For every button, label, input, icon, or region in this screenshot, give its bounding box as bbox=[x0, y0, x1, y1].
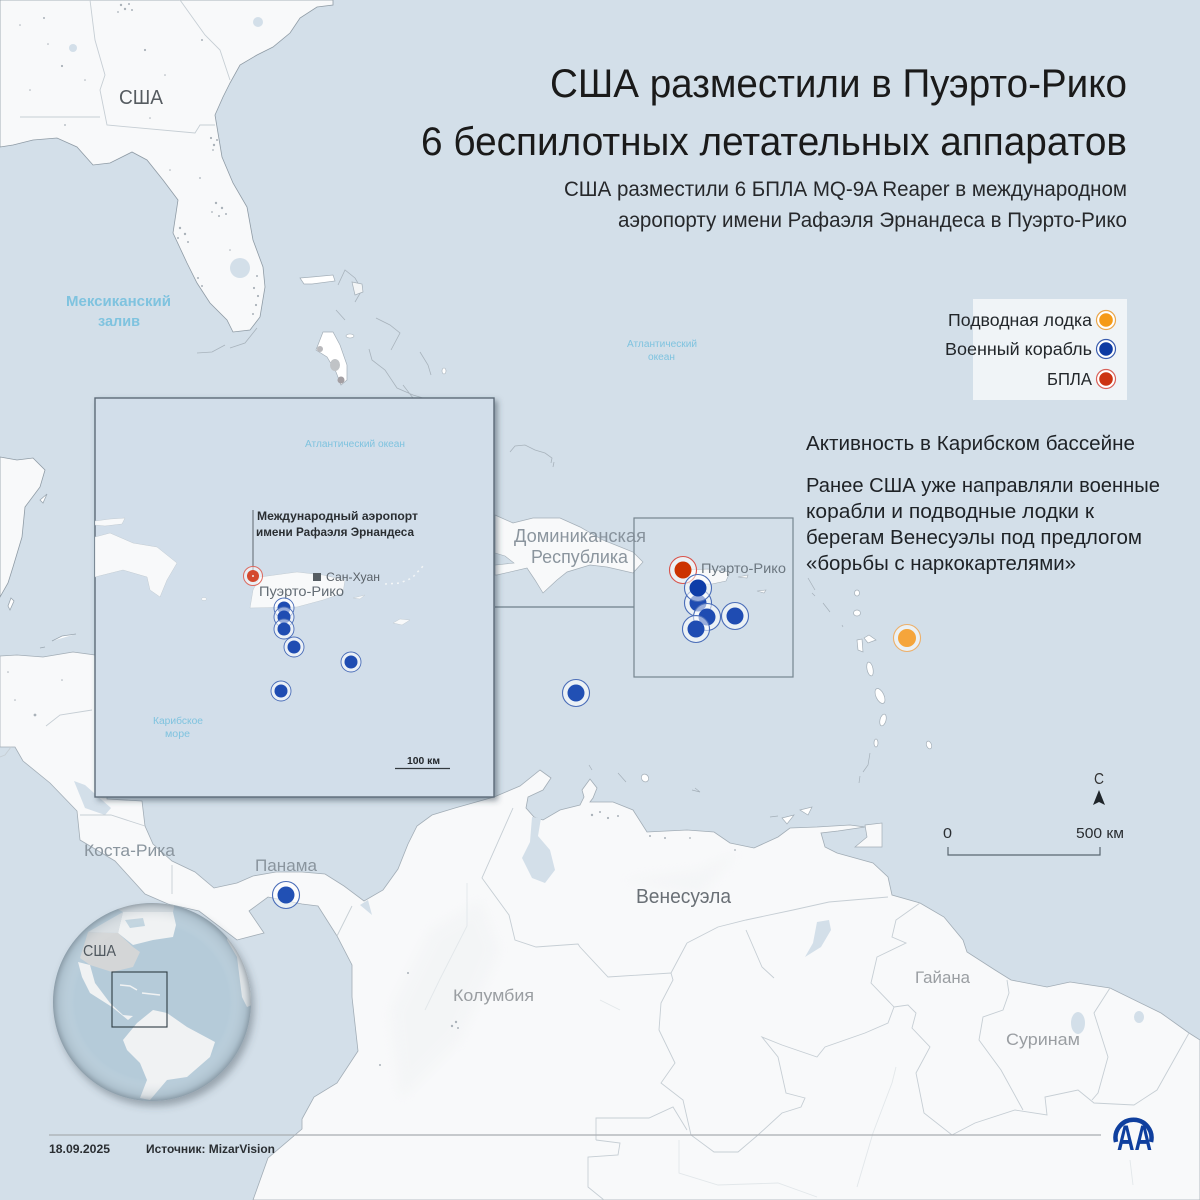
label: Puerto Rico: Пуэрто-Рико bbox=[259, 583, 344, 599]
inset map bbox=[95, 398, 494, 797]
title: 6 беспилотных летательных аппаратов bbox=[421, 120, 1127, 164]
callout: airport: Международный аэропорт bbox=[257, 509, 418, 523]
callout: airport: имени Рафаэля Эрнандеса bbox=[256, 525, 414, 539]
globe locator bbox=[53, 900, 257, 1101]
connector line from locator box to inset bbox=[495, 606, 634, 608]
land: Florida Keys and Bahamas bbox=[197, 270, 446, 398]
globe: high-latitude pale land bbox=[88, 902, 175, 933]
globe locator box bbox=[112, 972, 167, 1027]
sea label: Caribbean Sea: море bbox=[165, 729, 190, 740]
footer: date: 18.09.2025 bbox=[49, 1142, 110, 1156]
inset scale bar: 100 км bbox=[407, 756, 440, 767]
inset background bbox=[95, 398, 494, 797]
country labels: Коста-Рика bbox=[84, 841, 176, 860]
footer rule bbox=[49, 1134, 1101, 1136]
country labels: Суринам bbox=[1006, 1030, 1080, 1049]
land: Central and South America bbox=[0, 652, 1200, 1200]
marker: airport UAV bbox=[244, 566, 262, 586]
land: Puerto Rico and Virgin Islands bbox=[686, 569, 766, 593]
footer: source: Источник: MizarVision bbox=[146, 1142, 275, 1156]
land: Lesser Antilles bbox=[808, 578, 933, 783]
legend entry: UAV: БПЛА bbox=[1047, 369, 1092, 389]
globe label: USA: США bbox=[83, 943, 116, 960]
body text: Ранее США уже направляли военные bbox=[806, 475, 1160, 497]
body text: «борьбы с наркокартелями» bbox=[806, 553, 1076, 575]
sea label: Gulf of Mexico: Мексиканский bbox=[66, 293, 171, 310]
logo: Anadolu Agency: AA bbox=[1117, 1119, 1152, 1158]
text block: Caribbean activity bbox=[806, 433, 1160, 575]
sea label: Gulf of Mexico bbox=[66, 293, 171, 330]
body text bbox=[806, 475, 1160, 575]
globe ocean bbox=[53, 903, 251, 1101]
north arrow bbox=[1093, 771, 1105, 805]
country labels on Hispaniola and Puerto Rico bbox=[514, 526, 646, 567]
inset scale bar bbox=[395, 756, 450, 768]
land: Trinidad bbox=[855, 823, 882, 847]
land: Hispaniola bbox=[495, 515, 643, 593]
body text: берегам Венесуэлы под предлогом bbox=[806, 527, 1142, 549]
legend entry: warship: Военный корабль bbox=[945, 339, 1092, 359]
scale bar: 500 км bbox=[1076, 825, 1124, 842]
legend entry: UAV bbox=[1047, 369, 1116, 389]
land: Aruba, Curacao and small islands bbox=[589, 765, 812, 824]
globe: USA bbox=[80, 932, 140, 972]
terrain shading bbox=[390, 850, 740, 1100]
subtitle: США разместили 6 БПЛА MQ-9A Reaper в международном bbox=[564, 178, 1127, 201]
marker: UAV bbox=[670, 556, 696, 584]
logo: Anadolu Agency bbox=[1116, 1119, 1152, 1158]
callout: airport bbox=[253, 509, 418, 570]
country labels: Панама bbox=[255, 856, 318, 875]
globe land bbox=[78, 900, 257, 1100]
subtitle bbox=[564, 178, 1127, 232]
label: USA: США bbox=[119, 87, 164, 109]
globe: Hudson Bay bbox=[125, 918, 145, 928]
marker: warship Caribbean bbox=[562, 680, 590, 706]
sea label: Atlantic Ocean bbox=[627, 339, 697, 363]
locator box bbox=[634, 518, 793, 677]
country labels on Hispaniola and Puerto Rico: Доминиканская bbox=[514, 526, 646, 546]
sea label: Gulf of Mexico: залив bbox=[98, 313, 140, 330]
sea label: Caribbean Sea: Карибское bbox=[153, 715, 203, 727]
country labels: Венесуэла bbox=[636, 886, 732, 908]
label: San Juan: Сан-Хуан bbox=[326, 570, 380, 584]
marker: submarine bbox=[894, 624, 920, 652]
legend panel bbox=[973, 299, 1127, 400]
land: USA and Florida bbox=[0, 0, 333, 332]
sea label: Atlantic Ocean: Атлантический bbox=[627, 339, 697, 350]
globe: Caribbean islands bbox=[120, 985, 160, 995]
markers: warships near Puerto Rico bbox=[682, 574, 748, 642]
land: Haiti bay bbox=[495, 553, 514, 565]
land: Turks and Caicos bbox=[510, 445, 554, 467]
title: США разместили в Пуэрто-Рико bbox=[550, 62, 1127, 106]
sea label: Atlantic Ocean: Атлантический океан bbox=[305, 439, 405, 450]
country labels: Гайана bbox=[915, 968, 971, 987]
country labels on Hispaniola and Puerto Rico: Республика bbox=[531, 547, 629, 567]
label: Puerto Rico: Пуэрто-Рико bbox=[701, 560, 786, 576]
inset land bbox=[95, 518, 425, 625]
sea label: Caribbean Sea bbox=[153, 715, 203, 740]
marker: warship Panama bbox=[272, 882, 300, 908]
legend entry: submarine: Подводная лодка bbox=[948, 310, 1092, 330]
city speckles bbox=[7, 3, 736, 1066]
heading: Активность в Карибском бассейне bbox=[806, 433, 1135, 455]
lakes bbox=[69, 17, 1144, 1034]
scale bar bbox=[943, 825, 1124, 855]
sea label: Atlantic Ocean: океан bbox=[648, 352, 675, 363]
scale bar: 0 bbox=[943, 825, 952, 842]
markers: warships in inset bbox=[271, 598, 361, 701]
country labels bbox=[84, 841, 1080, 1049]
north arrow: С bbox=[1094, 771, 1104, 788]
country labels: Колумбия bbox=[453, 986, 534, 1005]
subtitle: аэропорту имени Рафаэля Эрнандеса в Пуэрто-Рико bbox=[618, 209, 1127, 232]
body text: корабли и подводные лодки к bbox=[806, 501, 1094, 523]
globe shading bbox=[53, 903, 251, 1101]
legend bbox=[945, 299, 1127, 400]
land: Yucatan bbox=[0, 457, 45, 597]
land: Cozumel and reef islands bbox=[8, 494, 76, 648]
main map markers bbox=[272, 556, 920, 908]
title bbox=[421, 62, 1127, 164]
